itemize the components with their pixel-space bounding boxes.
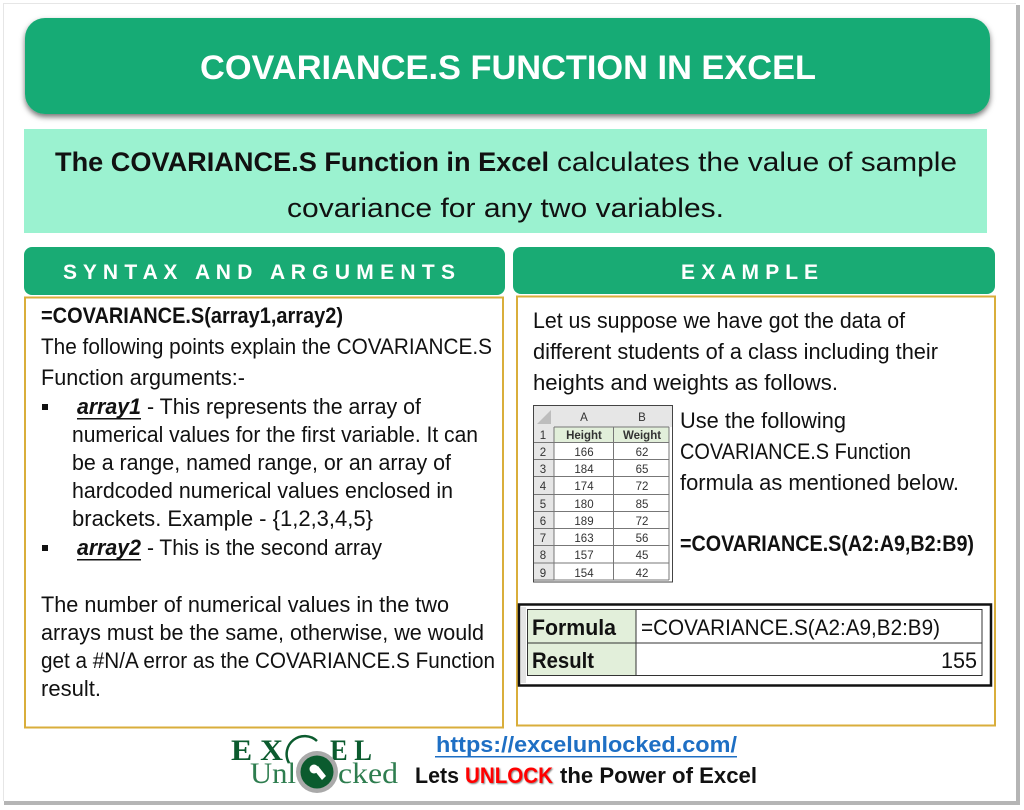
- data table: 184: [574, 464, 594, 476]
- note: result.: [41, 676, 101, 701]
- instruction text: formula as mentioned below.: [680, 470, 959, 495]
- data table: 4: [540, 481, 547, 493]
- argument: array1: - This represents the array of: [147, 394, 422, 419]
- note: arrays must be the same, otherwise, we would: [41, 620, 484, 645]
- argument: array1: array1: [77, 394, 141, 419]
- data table: 8: [540, 550, 546, 562]
- logo: Excel Unlocked: E L: [330, 734, 372, 767]
- intro text: Function arguments:-: [41, 365, 245, 390]
- argument: array1: hardcoded numerical values enclosed in: [72, 478, 453, 503]
- definition panel: The COVARIANCE.S Function in Excel: [55, 147, 549, 177]
- panel: syntax and arguments: [25, 298, 503, 728]
- tagline: Lets: [415, 763, 459, 788]
- result table: [519, 604, 991, 686]
- data table: 65: [636, 464, 648, 476]
- tagline: [415, 763, 757, 788]
- data table: 157: [574, 550, 594, 562]
- logo: Excel Unlocked: Unl: [250, 757, 296, 790]
- argument: array1: brackets. Example - {1,2,3,4,5}: [72, 506, 373, 531]
- instruction text: COVARIANCE.S Function: [680, 439, 911, 464]
- argument: array2: array2: [77, 535, 142, 560]
- data table: 7: [540, 533, 546, 545]
- logo: Excel Unlocked: cked: [338, 757, 398, 790]
- logo: Excel Unlocked: [231, 734, 398, 793]
- example formula: =COVARIANCE.S(A2:A9,B2:B9): [680, 531, 974, 556]
- result table: =COVARIANCE.S(A2:A9,B2:B9): [641, 615, 940, 640]
- heading: syntax and arguments: S Y N T A X A N D A R G U M E N T S: [63, 261, 455, 284]
- tagline: UNLOCK: [465, 763, 554, 788]
- definition panel: covariance for any two variables.: [287, 193, 724, 223]
- intro text: The following points explain the COVARIANCE.S: [41, 334, 492, 359]
- note: get a #N/A error as the COVARIANCE.S Function: [41, 648, 495, 673]
- data table: 180: [574, 499, 594, 511]
- data table: 154: [574, 568, 594, 580]
- heading: example: E X A M P L E: [681, 261, 818, 284]
- logo: Excel Unlocked: E X: [231, 734, 283, 767]
- title banner: [25, 18, 990, 114]
- tagline: the Power of Excel: [560, 763, 757, 788]
- argument: array2: - This is the second array: [147, 535, 382, 560]
- data table: Weight: [623, 430, 661, 442]
- data table: 5: [540, 499, 546, 511]
- example intro: Let us suppose we have got the data of: [533, 308, 906, 333]
- title banner: COVARIANCE.S FUNCTION IN EXCEL: [200, 49, 816, 87]
- data table: 2: [540, 447, 546, 459]
- argument: array1: be a range, named range, or an array of: [72, 450, 452, 475]
- data table: 166: [574, 447, 594, 459]
- argument: array2: [42, 535, 382, 560]
- panel: example: [517, 296, 995, 726]
- syntax formula: =COVARIANCE.S(array1,array2): [41, 303, 343, 328]
- data table: [534, 406, 672, 582]
- instruction text: Use the following: [680, 408, 846, 433]
- data table: 72: [636, 481, 648, 493]
- example intro: [533, 308, 938, 395]
- argument: array1: numerical values for the first variable. It can: [72, 422, 478, 447]
- example intro: heights and weights as follows.: [533, 370, 838, 395]
- result table: Result: [532, 648, 595, 673]
- data table: 3: [540, 464, 546, 476]
- website link: https://excelunlocked.com/: [436, 732, 738, 757]
- definition panel: [24, 129, 987, 233]
- data table: 174: [574, 481, 594, 493]
- data table: 45: [636, 550, 648, 562]
- result table: 155: [941, 648, 977, 673]
- data table: 189: [574, 516, 594, 528]
- note: [41, 592, 495, 701]
- result table: Formula: [532, 615, 617, 640]
- data table: 163: [574, 533, 594, 545]
- heading: example: [513, 247, 995, 294]
- heading: syntax and arguments: [24, 247, 505, 295]
- data table: 72: [636, 516, 648, 528]
- intro text: [41, 334, 492, 390]
- definition panel: calculates the value of sample: [557, 147, 957, 177]
- example intro: different students of a class including their: [533, 339, 938, 364]
- data table: 9: [540, 568, 546, 580]
- data table: 1: [540, 430, 546, 442]
- instruction text: [680, 408, 959, 495]
- data table: 85: [636, 499, 648, 511]
- data table: 62: [636, 447, 648, 459]
- data table: Height: [566, 430, 602, 442]
- argument: array1: [42, 394, 478, 531]
- data table: B: [638, 412, 646, 424]
- note: The number of numerical values in the two: [41, 592, 449, 617]
- data table: A: [580, 412, 588, 424]
- data table: 6: [540, 516, 546, 528]
- data table: 56: [636, 533, 648, 545]
- data table: 42: [636, 568, 648, 580]
